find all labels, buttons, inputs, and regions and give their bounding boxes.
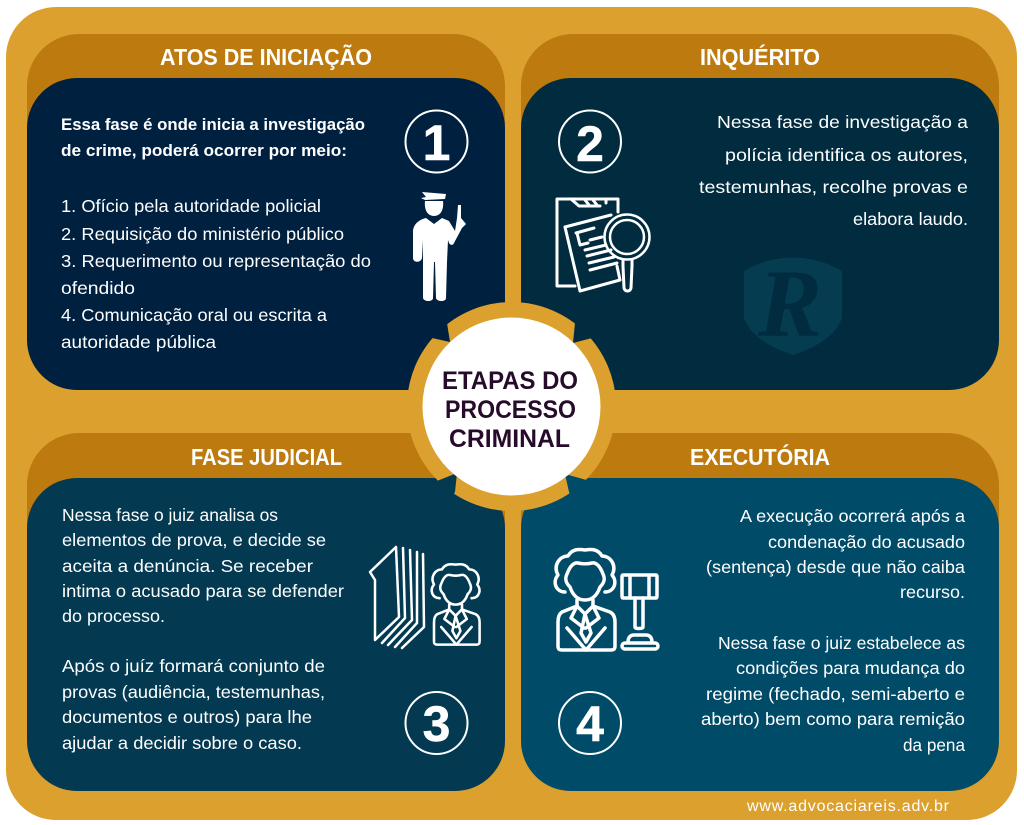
number 1 — [406, 110, 468, 172]
heading tab: fase judicial — [27, 433, 505, 583]
center badge — [407, 302, 616, 511]
description text: do processo. — [62, 606, 165, 626]
intro text: Essa fase é onde inicia a investigação — [61, 116, 365, 134]
panel: atos de iniciação — [27, 34, 505, 390]
description text: da pena — [903, 735, 965, 755]
icon: police officer — [413, 192, 466, 301]
description text: provas (audiência, testemunhas, — [62, 682, 325, 702]
description text: (sentença) desde que não caiba — [706, 557, 965, 577]
website footer: www.advocaciareis.adv.br — [746, 798, 950, 815]
description text: Nessa fase de investigação a — [717, 112, 968, 132]
center title: ETAPAS DO — [442, 367, 578, 395]
panel body 3 — [27, 478, 505, 791]
center title: PROCESSO — [445, 396, 576, 424]
list of means: 1. Ofício pela autoridade policial — [61, 196, 321, 216]
description text: elabora laudo. — [853, 209, 968, 229]
number 3: 3 — [423, 696, 450, 752]
ring notch top right — [573, 318, 597, 343]
description text: A execução ocorrerá após a — [740, 506, 965, 526]
description text: regime (fechado, semi-aberto e — [706, 684, 965, 704]
list of means: 3. Requerimento ou representação do — [61, 251, 371, 271]
description text: Nessa fase o juiz analisa os — [62, 505, 278, 525]
watermark logo: R — [757, 250, 822, 357]
ring notch top left — [426, 318, 450, 342]
icon: small judge — [432, 564, 480, 645]
description text: testemunhas, recolhe provas e — [699, 177, 968, 197]
heading tab: executória — [521, 433, 999, 583]
list of means: 4. Comunicação oral ou escrita a — [61, 305, 327, 325]
description text: condições para mudança do — [736, 658, 965, 678]
watermark logo — [744, 250, 842, 357]
panel body 4 — [521, 478, 999, 791]
center title: CRIMINAL — [449, 425, 570, 453]
description text: recurso. — [900, 582, 965, 602]
ring notch bottom left — [432, 473, 457, 500]
panel: executória — [521, 433, 999, 791]
description text — [701, 506, 965, 755]
description text: condenação do acusado — [768, 532, 965, 552]
description text: intima o acusado para se defender — [62, 581, 344, 601]
intro text: de crime, poderá ocorrer por meio: — [61, 142, 347, 160]
description text: documentos e outros) para lhe — [62, 707, 312, 727]
description text: Após o juíz formará conjunto de — [62, 656, 325, 676]
list of means — [61, 196, 371, 352]
intro text — [61, 116, 365, 160]
description text: Nessa fase o juiz estabelece as — [718, 633, 965, 653]
icon: document and magnifier — [557, 199, 650, 291]
list of means: ofendido — [61, 278, 135, 298]
heading tab: inquérito: INQUÉRITO — [700, 43, 820, 70]
description text: aberto) bem como para remição — [701, 709, 965, 729]
icon: law book — [370, 547, 424, 648]
number 2: 2 — [576, 116, 604, 172]
description text: ajudar a decidir sobre o caso. — [62, 733, 302, 753]
panel: inquérito — [521, 34, 999, 390]
icon: judge and gavel — [555, 550, 658, 650]
list of means: autoridade pública — [61, 332, 216, 352]
description text — [699, 112, 968, 229]
number 4: 4 — [576, 696, 604, 752]
number 3 — [406, 692, 468, 754]
center title — [442, 367, 578, 453]
panel body 2 — [521, 78, 999, 390]
badge ring — [407, 302, 616, 511]
heading tab: fase judicial: FASE JUDICIAL — [191, 444, 342, 470]
panel body 1 — [27, 78, 505, 390]
description text: elementos de prova, e decide se — [62, 530, 326, 550]
heading tab: atos de iniciação — [27, 34, 505, 184]
description text: aceita a denúncia. Se receber — [62, 556, 313, 576]
number 4 — [559, 692, 621, 754]
number 2 — [559, 110, 621, 172]
description text: polícia identifica os autores, — [725, 145, 968, 165]
heading tab: inquérito — [521, 34, 999, 184]
heading tab: atos de iniciação: ATOS DE INICIAÇÃO — [160, 43, 372, 70]
ring notch bottom right — [565, 474, 594, 502]
number 1: 1 — [423, 115, 450, 171]
panel: fase judicial — [27, 433, 505, 791]
heading tab: executória: EXECUTÓRIA — [690, 443, 830, 470]
description text — [62, 505, 344, 753]
badge disc — [422, 318, 600, 496]
list of means: 2. Requisição do ministério público — [61, 224, 344, 244]
